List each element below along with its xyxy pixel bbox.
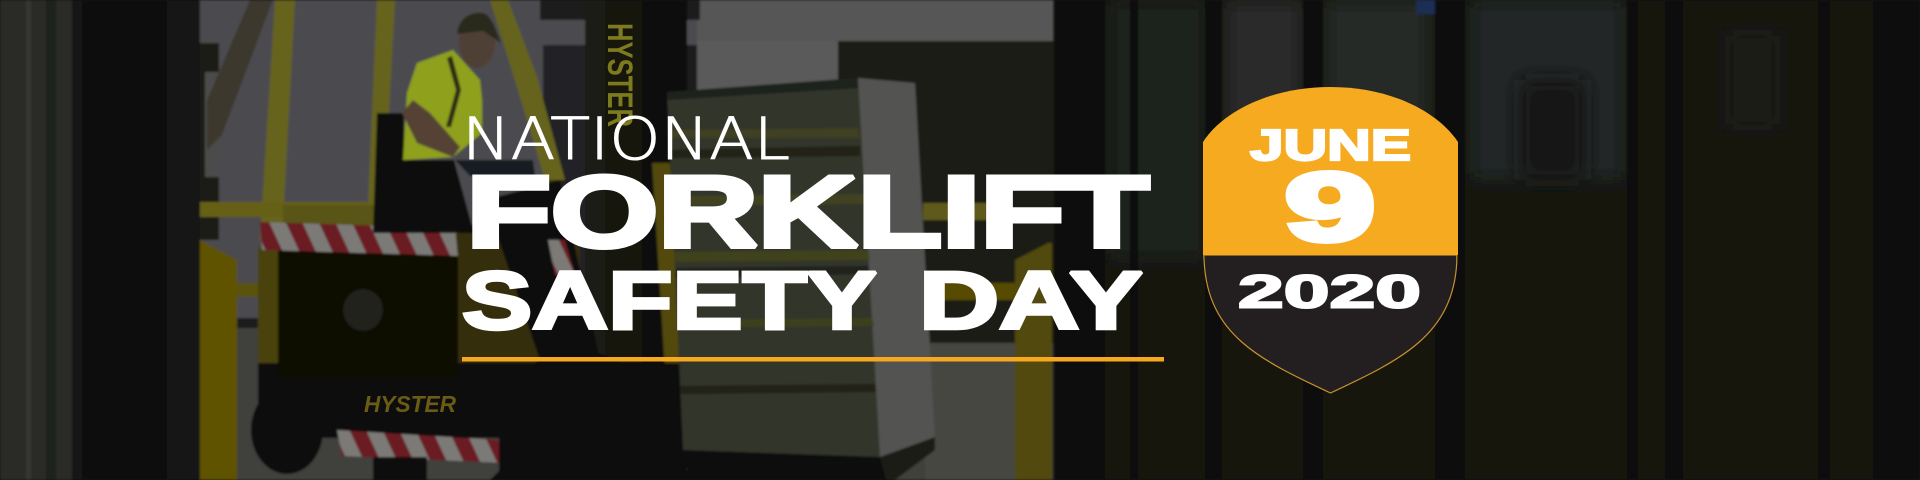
heading: SAFETY DAY: [462, 256, 1143, 346]
driver: [373, 13, 535, 233]
date: JUNE: JUNE: [1250, 121, 1411, 170]
dark doorway box: [838, 41, 1054, 343]
forklift mast: [540, 0, 700, 480]
left door frame: [0, 0, 219, 480]
heading: NATIONAL: NATIONAL: [462, 105, 790, 173]
badge: lower dark section: [1204, 255, 1457, 393]
date: 2020: 2020: [1238, 266, 1421, 318]
heading: SAFETY DAY: DAY: [919, 256, 1143, 346]
dark warehouse door panels: [1053, 0, 1920, 480]
forklift body: [251, 180, 700, 480]
heading: FORKLIFT: FORKLIFT: [466, 156, 1149, 268]
forklift lettering: [364, 23, 639, 417]
right bollard: [1015, 243, 1052, 480]
date: 9: 9: [1285, 154, 1375, 261]
floor: [200, 320, 1060, 480]
title block: [462, 105, 1164, 362]
rear HYSTER label: HYSTER: [364, 391, 456, 417]
wooden beam: [207, 0, 273, 150]
warehouse wall: [0, 0, 1060, 480]
date badge: [1203, 87, 1458, 393]
small wall bars: [237, 283, 259, 328]
forklift cab frame: [200, 0, 565, 240]
badge: upper orange section: [1203, 87, 1458, 255]
mast HYSTER label: HYSTER: [600, 23, 639, 127]
left bollard: [200, 240, 237, 480]
pallet of boxes: [667, 78, 935, 480]
rule: [462, 357, 1164, 362]
heading: SAFETY DAY: SAFETY: [462, 256, 877, 346]
